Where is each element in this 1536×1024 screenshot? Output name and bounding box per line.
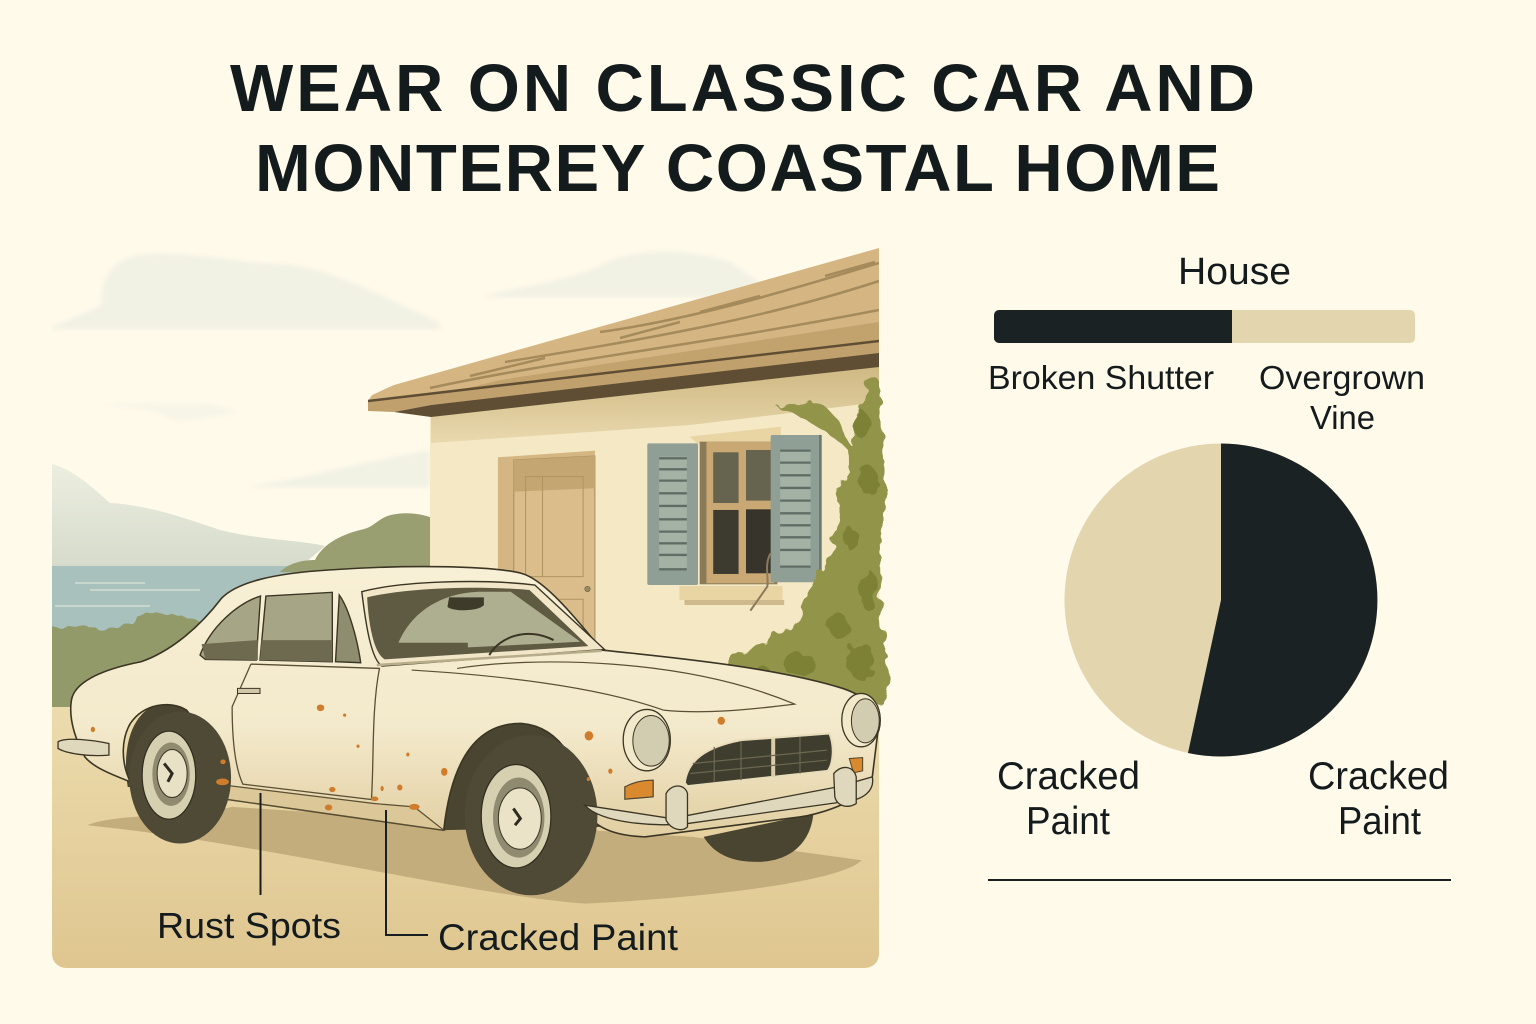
sea: [52, 566, 296, 631]
bar label: overgrown vine: Vine: [1310, 399, 1375, 436]
broken shutter hinge: [750, 553, 771, 611]
pie label: cracked paint left: [997, 755, 1140, 843]
car: [58, 567, 880, 904]
door: [498, 451, 595, 647]
car body: [71, 567, 878, 837]
rear side windows: [200, 592, 361, 663]
bar label: overgrown vine: [1259, 359, 1425, 436]
headlights: [623, 693, 880, 771]
panel: illustration of car and coastal home: [20, 248, 890, 968]
ground: [52, 700, 879, 968]
callout: rust spots: Rust Spots: [157, 905, 341, 946]
pie chart: [1064, 444, 1378, 756]
title: WEAR ON CLASSIC CAR AND: [230, 51, 1255, 126]
rear wheel: [129, 711, 231, 844]
title: MONTEREY COASTAL HOME: [255, 131, 1220, 206]
distant hills: [52, 464, 325, 567]
rear bumper: [58, 739, 109, 756]
shadow under car: [87, 807, 862, 904]
house: [368, 248, 879, 700]
hedge on left: [52, 612, 200, 707]
right shutter: [771, 435, 822, 582]
vine: [730, 377, 890, 705]
door and panel lines: [232, 664, 379, 800]
green hill behind house: [280, 513, 432, 575]
left shutter: [647, 443, 698, 585]
wall shadow under the eave: [431, 362, 879, 443]
stacked bar chart: [994, 310, 1415, 343]
windshield: [362, 582, 604, 666]
window: [647, 427, 822, 611]
callout: cracked paint: [386, 810, 679, 958]
callout: cracked paint: Cracked Paint: [438, 917, 679, 958]
pie label: cracked paint right: Paint: [1338, 800, 1421, 843]
front wheel: [465, 735, 597, 895]
pie label: cracked paint right: [1308, 755, 1449, 843]
wall: [430, 404, 879, 664]
roof: [368, 248, 879, 417]
rocker panel: [217, 784, 444, 830]
pie label: cracked paint left: Cracked: [997, 755, 1140, 798]
front bumper: [585, 767, 873, 830]
far front wheel: [704, 814, 813, 862]
pie label: cracked paint left: Paint: [1026, 800, 1110, 843]
pie label: cracked paint right: Cracked: [1308, 755, 1449, 798]
bar label: overgrown vine: Overgrown: [1259, 359, 1425, 396]
chart heading: House: House: [1178, 251, 1291, 293]
grille: [685, 733, 833, 786]
door handle: [237, 688, 260, 693]
turn signal lights: [625, 757, 863, 799]
wheel arches: [126, 703, 224, 800]
hood lines: [412, 662, 795, 712]
title: [230, 51, 1255, 206]
baseline rule: [988, 879, 1451, 881]
bar label: broken shutter: Broken Shutter: [988, 359, 1214, 396]
clouds: [50, 252, 770, 487]
rust spots: [91, 704, 725, 811]
